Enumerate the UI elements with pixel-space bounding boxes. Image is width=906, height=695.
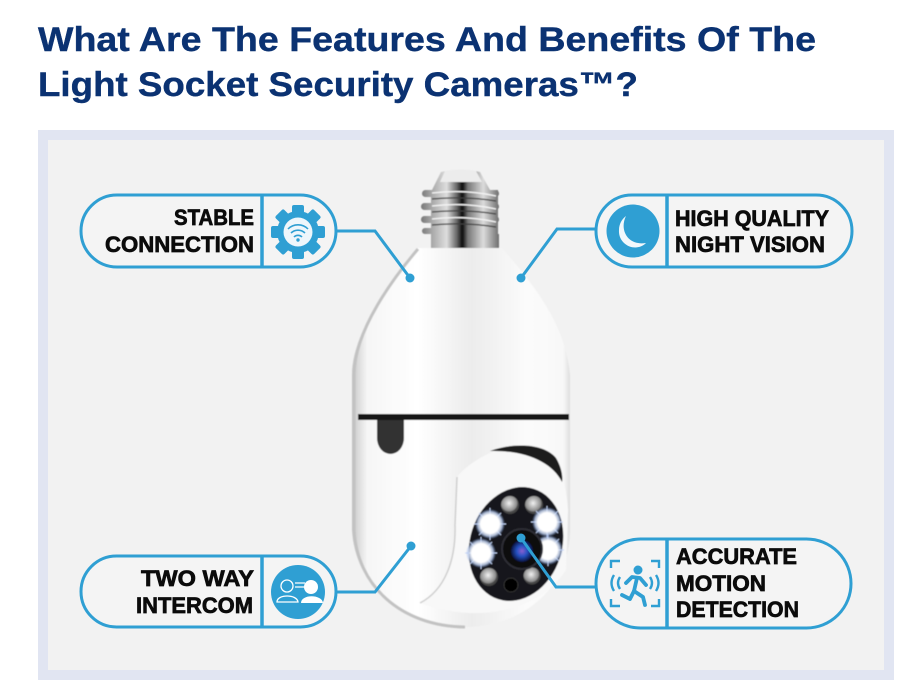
black tab xyxy=(377,420,404,454)
title: What Are The Features And Benefits Of The xyxy=(38,21,816,59)
callout: two way intercom xyxy=(81,542,416,627)
title xyxy=(38,21,816,104)
callout: accurate motion detection: ACCURATE xyxy=(676,544,797,569)
callout: high quality night vision: NIGHT VISION xyxy=(675,232,825,257)
callout: two way intercom: TWO WAY xyxy=(141,566,254,591)
callout: two way intercom: INTERCOM xyxy=(136,593,253,618)
lens xyxy=(502,529,542,569)
callout: accurate motion detection xyxy=(516,534,851,628)
screw base xyxy=(421,170,499,248)
camera head xyxy=(420,445,578,613)
bulb body xyxy=(352,248,570,627)
bulb left edge shading xyxy=(354,249,465,627)
callout: accurate motion detection: DETECTION xyxy=(676,597,799,622)
IR sensor xyxy=(504,578,518,592)
callout: stable connection: CONNECTION xyxy=(105,232,254,257)
title: Light Socket Security Cameras™? xyxy=(38,66,638,104)
camera face xyxy=(454,475,578,613)
panel: image frame xyxy=(43,135,889,675)
callout: high quality night vision: HIGH QUALITY xyxy=(675,206,829,231)
icon: gear with wifi xyxy=(271,205,325,259)
black seam xyxy=(358,414,569,420)
icon: two people xyxy=(271,565,325,619)
callout: stable connection: STABLE xyxy=(174,205,254,230)
callout: high quality night vision xyxy=(516,195,852,282)
unlit LEDs xyxy=(480,496,543,586)
lit LEDs xyxy=(465,506,564,569)
icon: moon xyxy=(606,204,660,258)
illustration: light socket camera xyxy=(352,170,578,627)
callout: accurate motion detection: MOTION xyxy=(676,571,766,596)
callout: stable connection xyxy=(81,195,414,282)
icon: running person xyxy=(611,561,659,606)
